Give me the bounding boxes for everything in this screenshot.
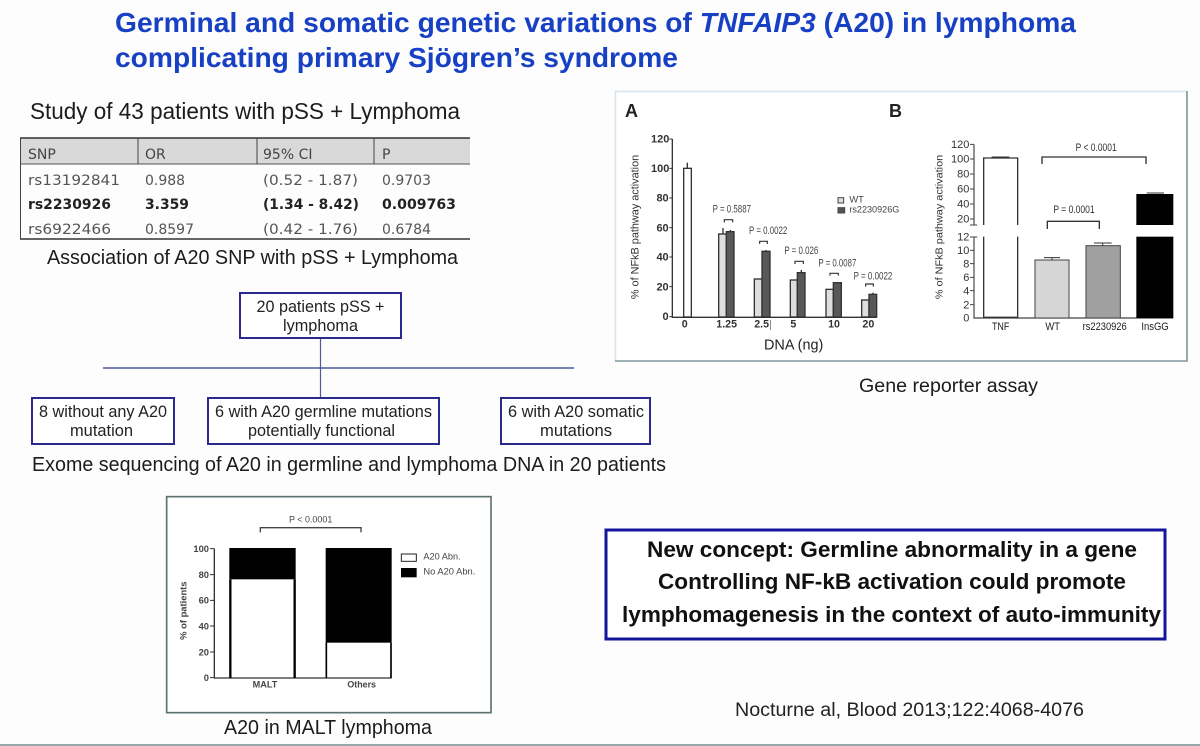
SNP association table [20, 138, 470, 239]
chart: A20 in MALT lymphoma: 0 [204, 673, 209, 683]
heading: study of 43 patients: Study of 43 patients with pSS + Lymphoma [30, 98, 460, 124]
table header: P [382, 147, 390, 163]
chart B: NFkB activation by variant: 8 [963, 258, 969, 270]
callout: new concept: lymphomagenesis in the context of auto-immunity [622, 602, 1162, 627]
table row: rs2230926: rs2230926 [28, 197, 111, 213]
title [115, 7, 1076, 73]
table row: rs6922466 [28, 222, 431, 238]
chart B: NFkB activation by variant: 12 [957, 232, 969, 244]
chart B: NFkB activation by variant: 100 [951, 154, 969, 166]
table row: rs2230926 [28, 197, 456, 213]
chart: A20 in MALT lymphoma: P < 0.0001 [289, 515, 332, 525]
caption: exome sequencing: Exome sequencing of A20 in germline and lymphoma DNA in 20 patients [32, 454, 666, 476]
chart B: NFkB activation by variant: P < 0.0001 [1076, 142, 1117, 154]
chart B: NFkB activation by variant: 10 [957, 245, 969, 257]
chart A: NFkB activation vs DNA: WT [849, 195, 864, 205]
box: 20 patients: lymphoma [283, 316, 359, 335]
box: 20 patients: 20 patients pSS + [256, 297, 385, 316]
table row: rs2230926: 3.359 [145, 197, 189, 213]
title: Germinal and somatic genetic variations of TNFAIP3 (A20) in lymphoma [115, 7, 1076, 38]
chart: A20 in MALT lymphoma: No A20 Abn. [423, 566, 475, 576]
chart: A20 in MALT lymphoma: 100 [193, 544, 209, 554]
chart B: NFkB activation by variant: % of NFkB pathway activation [934, 155, 945, 299]
chart A: NFkB activation vs DNA: 60 [656, 222, 669, 234]
box: 6 germline mutations [208, 398, 439, 444]
chart A: NFkB activation vs DNA: P = 0.0087 [818, 257, 856, 269]
chart A: NFkB activation vs DNA: 1.25 [716, 318, 737, 330]
chart A: NFkB activation vs DNA: 5 [790, 318, 796, 330]
chart B: NFkB activation by variant: 80 [957, 169, 969, 181]
table row: rs13192841: (0.52 - 1.87) [263, 173, 358, 189]
table header: 95% CI [263, 147, 312, 163]
panel: gene reporter assay charts [615, 91, 1187, 361]
chart: A20 in MALT lymphoma: MALT [253, 679, 278, 689]
chart: A20 in MALT lymphoma: 20 [199, 647, 209, 657]
table row: rs13192841: rs13192841 [28, 173, 120, 189]
callout: new concept [606, 530, 1165, 639]
table row: rs13192841 [28, 173, 431, 189]
chart A: NFkB activation vs DNA: P = 0.0022 [749, 225, 787, 237]
panel letter A: A [625, 101, 638, 121]
box: 6 somatic mutations: mutations [540, 421, 612, 440]
caption: A20 in MALT lymphoma: A20 in MALT lymphoma [224, 717, 433, 739]
callout: new concept: New concept: Germline abnormality in a gene [647, 537, 1137, 562]
flow diagram [32, 293, 650, 444]
chart A: NFkB activation vs DNA: 80 [656, 193, 669, 205]
box: 8 without mutation: mutation [70, 421, 133, 440]
table row: rs6922466: 0.6784 [382, 222, 431, 238]
chart B: NFkB activation by variant: 60 [957, 184, 969, 196]
chart B: NFkB activation by variant [934, 139, 1173, 333]
chart A: NFkB activation vs DNA: P = 0.5887 [713, 204, 751, 216]
caption: association of A20 SNP: Association of A20 SNP with pSS + Lymphoma [47, 247, 459, 269]
chart A: NFkB activation vs DNA: 20 [656, 281, 669, 293]
chart A: NFkB activation vs DNA: 120 [651, 134, 669, 146]
chart: A20 in MALT lymphoma: 80 [199, 570, 209, 580]
table row: rs6922466: (0.42 - 1.76) [263, 222, 358, 238]
chart: A20 in MALT lymphoma: Others [347, 679, 376, 689]
chart: A20 in MALT lymphoma: A20 Abn. [423, 551, 461, 561]
chart: A20 in MALT lymphoma: % of patients [179, 581, 189, 640]
table row: rs6922466: 0.8597 [145, 222, 194, 238]
table header: OR [145, 147, 166, 163]
chart: A20 in MALT lymphoma: 40 [199, 621, 209, 631]
box: 8 without mutation [32, 398, 174, 444]
table row: rs2230926: 0.009763 [382, 197, 456, 213]
chart A: NFkB activation vs DNA: DNA (ng) [764, 337, 823, 353]
table header: SNP [28, 147, 56, 163]
table header [28, 147, 390, 163]
chart A: NFkB activation vs DNA: 0 [663, 311, 669, 323]
box: 6 germline mutations: potentially functional [248, 421, 395, 440]
chart B: NFkB activation by variant: rs2230926 [1083, 321, 1127, 333]
callout: new concept: Controlling NF-kB activation could promote [658, 569, 1126, 594]
chart B: NFkB activation by variant: 120 [951, 139, 969, 151]
chart A: NFkB activation vs DNA: 10 [828, 318, 840, 330]
chart B: NFkB activation by variant: P = 0.0001 [1053, 204, 1095, 216]
chart A: NFkB activation vs DNA [630, 134, 899, 353]
chart B: NFkB activation by variant: 4 [963, 285, 969, 297]
box: 6 somatic mutations [501, 398, 650, 444]
chart A: NFkB activation vs DNA: rs2230926G [849, 205, 899, 215]
chart A: NFkB activation vs DNA: P = 0.0022 [854, 271, 892, 283]
chart B: NFkB activation by variant: 20 [957, 214, 969, 226]
box: 8 without mutation: 8 without any A20 [39, 402, 167, 421]
chart A: NFkB activation vs DNA: 40 [656, 252, 669, 264]
panel letter B: B [889, 101, 902, 121]
chart B: NFkB activation by variant: TNF [992, 321, 1010, 333]
chart A: NFkB activation vs DNA: 2.5 [754, 318, 769, 330]
chart A: NFkB activation vs DNA: 20 [862, 318, 874, 330]
chart B: NFkB activation by variant: InsGG [1141, 321, 1169, 333]
chart B: NFkB activation by variant: WT [1045, 321, 1060, 333]
chart A: NFkB activation vs DNA: 100 [651, 163, 669, 175]
chart B: NFkB activation by variant: 40 [957, 199, 969, 211]
table row: rs2230926: (1.34 - 8.42) [263, 197, 359, 213]
table row: rs13192841: 0.988 [145, 173, 185, 189]
chart A: NFkB activation vs DNA: P = 0.026 [784, 245, 818, 257]
table row: rs6922466: rs6922466 [28, 222, 111, 238]
chart B: NFkB activation by variant: 2 [963, 299, 969, 311]
title: complicating primary Sjögren’s syndrome [115, 42, 678, 73]
caption: gene reporter assay: Gene reporter assay [859, 376, 1039, 397]
citation: Nocturne al, Blood 2013;122:4068-4076 [735, 700, 1084, 721]
chart: A20 in MALT lymphoma [167, 497, 491, 713]
chart A: NFkB activation vs DNA: % of NFkB pathway activation [630, 155, 642, 299]
chart A: NFkB activation vs DNA: 0 [682, 318, 688, 330]
box: 20 patients [240, 293, 401, 338]
box: 6 somatic mutations: 6 with A20 somatic [508, 402, 644, 421]
chart B: NFkB activation by variant: 0 [963, 313, 969, 325]
chart: A20 in MALT lymphoma: 60 [199, 596, 209, 606]
table row: rs13192841: 0.9703 [382, 173, 431, 189]
box: 6 germline mutations: 6 with A20 germline mutations [215, 402, 432, 421]
chart B: NFkB activation by variant: 6 [963, 272, 969, 284]
